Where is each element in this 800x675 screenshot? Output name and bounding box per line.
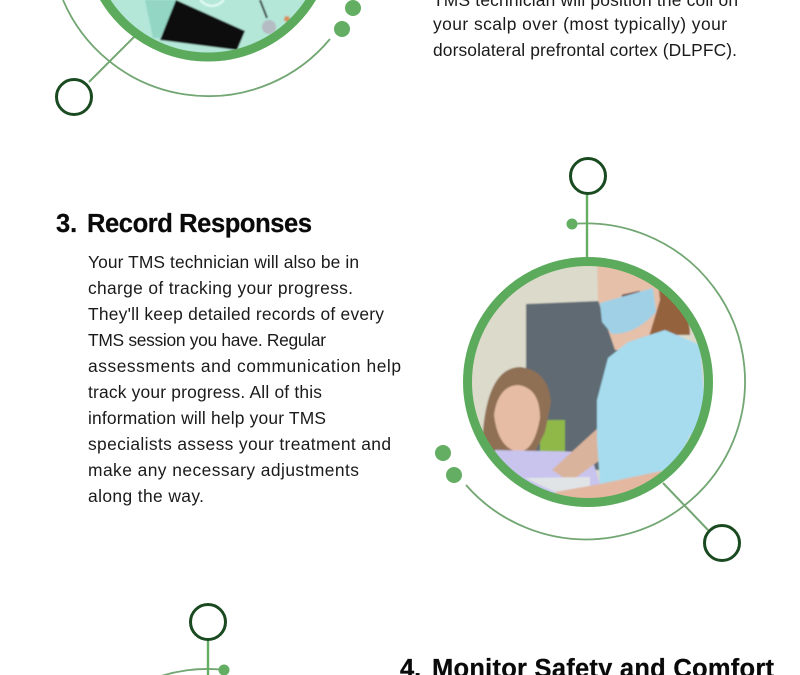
text block: step 2 body: dorsolateral prefrontal cortex (DLPFC). xyxy=(433,40,737,60)
text block: step 3 body: specialists assess your treatment and xyxy=(88,434,391,454)
text block: step 3 body: They'll keep detailed records of every xyxy=(88,304,384,324)
dots: step 3 xyxy=(435,218,578,483)
heading: step 3: Record Responses xyxy=(87,210,312,238)
text block: step 3 body: track your progress. All of this xyxy=(88,382,322,402)
node ring: step 3 bottom xyxy=(704,526,740,560)
dot: step 4 xyxy=(218,664,230,675)
text block: step 3 body: Your TMS technician will also be in xyxy=(88,252,359,272)
text block: step 3 body: assessments and communication help xyxy=(88,356,401,376)
text block: step 3 body: information will help your TMS xyxy=(88,408,326,428)
node ring: step 3 top xyxy=(570,158,606,194)
text block: step 3 body: charge of tracking your progress. xyxy=(88,278,353,298)
connector line: step 3 bottom xyxy=(663,483,708,530)
node ring: step 2 xyxy=(56,80,92,114)
photo ring: step 3 xyxy=(468,262,708,502)
text block: step 2 body: your scalp over (most typically) your xyxy=(433,14,727,34)
text block: step 2 body xyxy=(433,0,738,60)
node ring: step 4 xyxy=(190,604,226,640)
panel: step 2 graphic xyxy=(56,0,361,114)
arc: step 4 orbit xyxy=(158,669,224,675)
connector line: step 4 xyxy=(207,640,209,675)
connector line: step 2 xyxy=(89,37,134,82)
panel: step 3 graphic xyxy=(435,158,745,560)
connector line: step 3 top xyxy=(586,194,588,260)
dots: step 2 xyxy=(334,0,361,37)
photo: clinician with tablet xyxy=(110,0,306,52)
photo ring: step 2 xyxy=(87,0,329,57)
arc: step 3 orbit xyxy=(466,223,745,539)
photo: technician and patient xyxy=(472,266,704,498)
text block: step 3 body: TMS session you have. Regular xyxy=(88,330,326,350)
heading: step 3: 3. xyxy=(56,210,77,238)
arc: step 2 orbit xyxy=(63,0,330,96)
text block: step 3 body: along the way. xyxy=(88,486,204,506)
text block: step 3 body: make any necessary adjustments xyxy=(88,460,359,480)
text block: step 3 body xyxy=(88,252,401,506)
panel: step 4 graphic xyxy=(158,604,230,675)
